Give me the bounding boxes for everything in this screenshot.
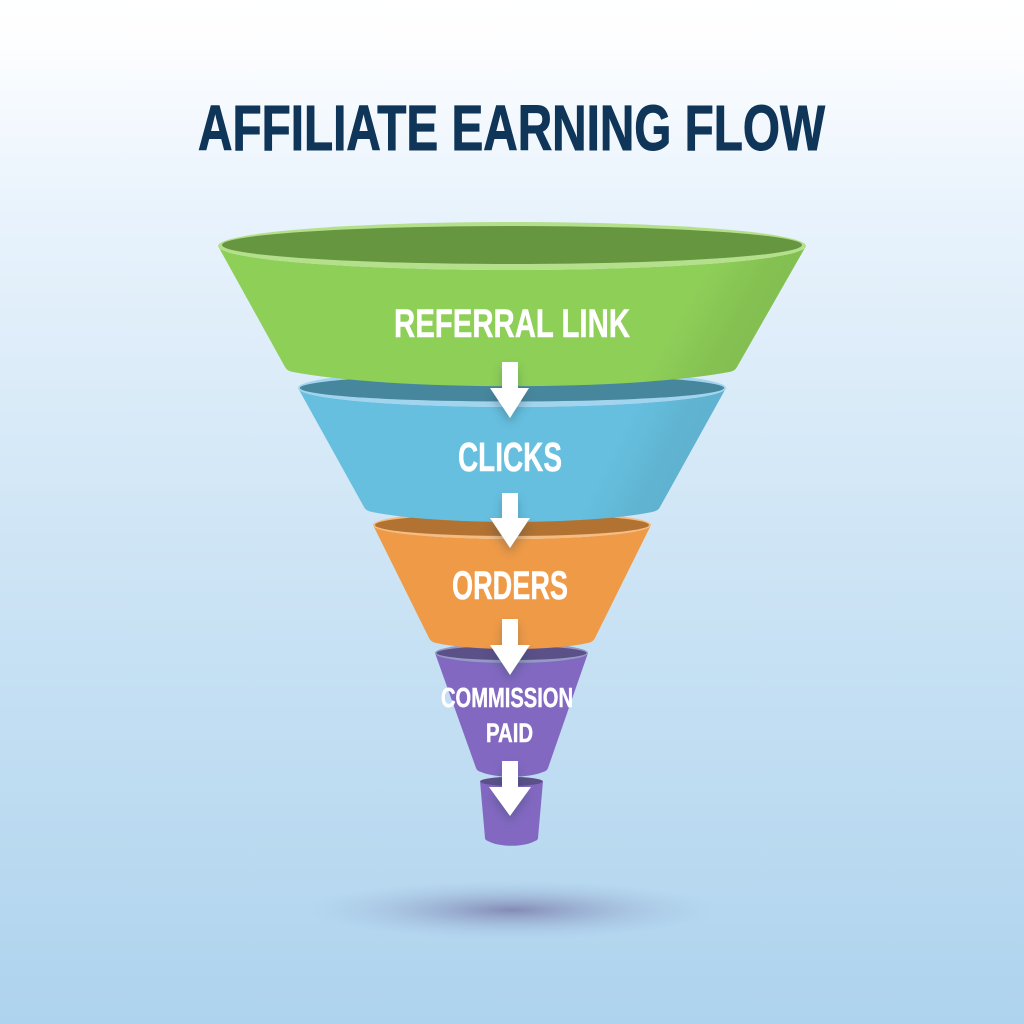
label: commission paid: COMMISSION: [441, 682, 573, 713]
tier: commission paid: [435, 643, 588, 777]
tier: referral link: [218, 222, 806, 386]
label: commission paid: [441, 682, 573, 748]
funnel: [218, 222, 806, 846]
tier: spout: [480, 777, 543, 846]
arrow: referral to clicks: [490, 362, 529, 424]
arrow: orders to commission: [490, 619, 530, 681]
label: orders: ORDERS: [452, 564, 568, 608]
ground shadow: [307, 880, 717, 940]
arrow: clicks to orders: [490, 493, 530, 554]
arrow: commission to spout: [489, 761, 531, 822]
tier: clicks: [298, 369, 726, 522]
title: AFFILIATE EARNING FLOW: [198, 92, 825, 164]
label: referral link: REFERRAL LINK: [394, 302, 630, 346]
label: clicks: CLICKS: [458, 434, 562, 480]
tier: orders: [373, 511, 651, 649]
label: commission paid: PAID: [486, 718, 533, 748]
